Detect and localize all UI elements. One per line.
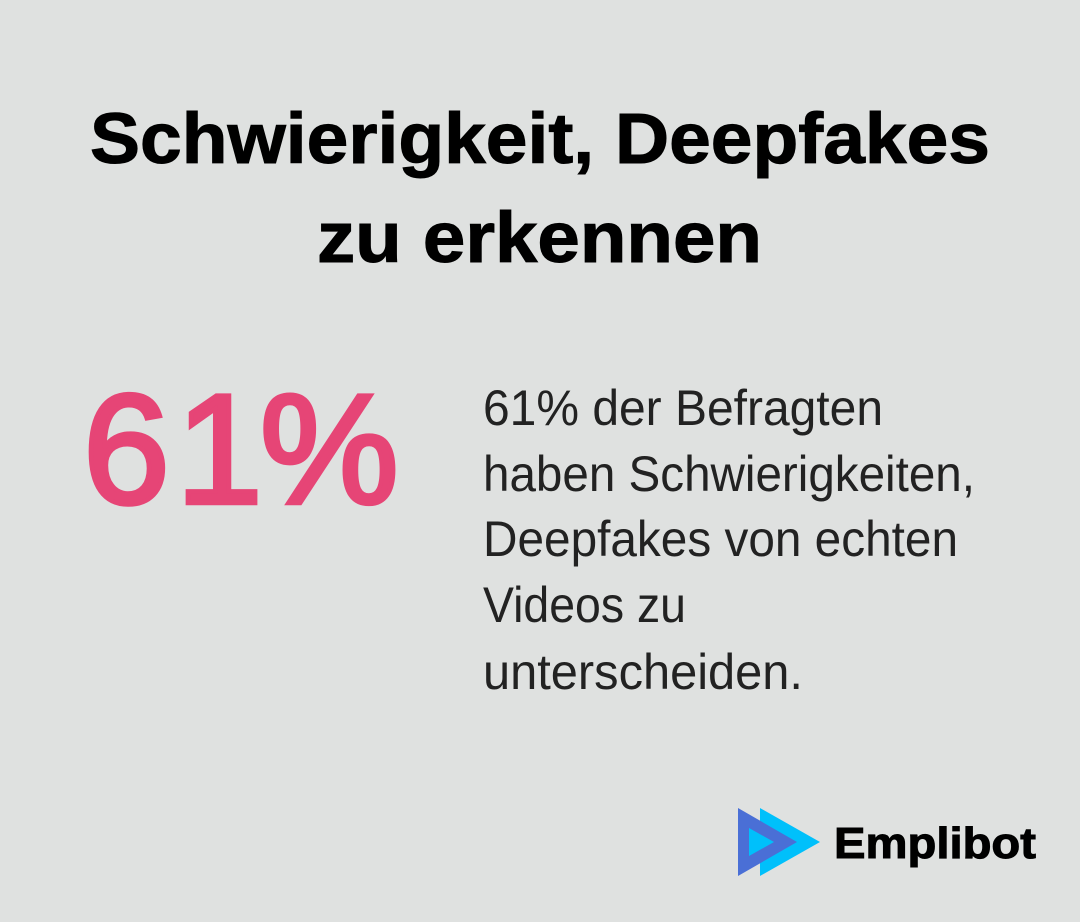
description text: haben Schwierigkeiten,	[483, 446, 975, 502]
big statistic: 61%: 1	[176, 363, 263, 537]
icon: play triangles	[738, 808, 820, 876]
description text: Deepfakes von echten	[483, 511, 958, 567]
title: zu erkennen	[317, 199, 762, 278]
description text: Videos zu	[483, 577, 686, 633]
big statistic: 61%: %	[260, 363, 399, 537]
title: Schwierigkeit, Deepfakes	[90, 100, 990, 179]
logo: Emplibot	[738, 808, 1036, 876]
big statistic: 61%: 6	[83, 363, 170, 537]
description text: unterscheiden.	[483, 644, 803, 700]
logo wordmark: Emplibot	[834, 819, 1036, 868]
description text: 61% der Befragten	[483, 380, 883, 436]
title	[90, 100, 990, 278]
description text	[483, 380, 975, 700]
